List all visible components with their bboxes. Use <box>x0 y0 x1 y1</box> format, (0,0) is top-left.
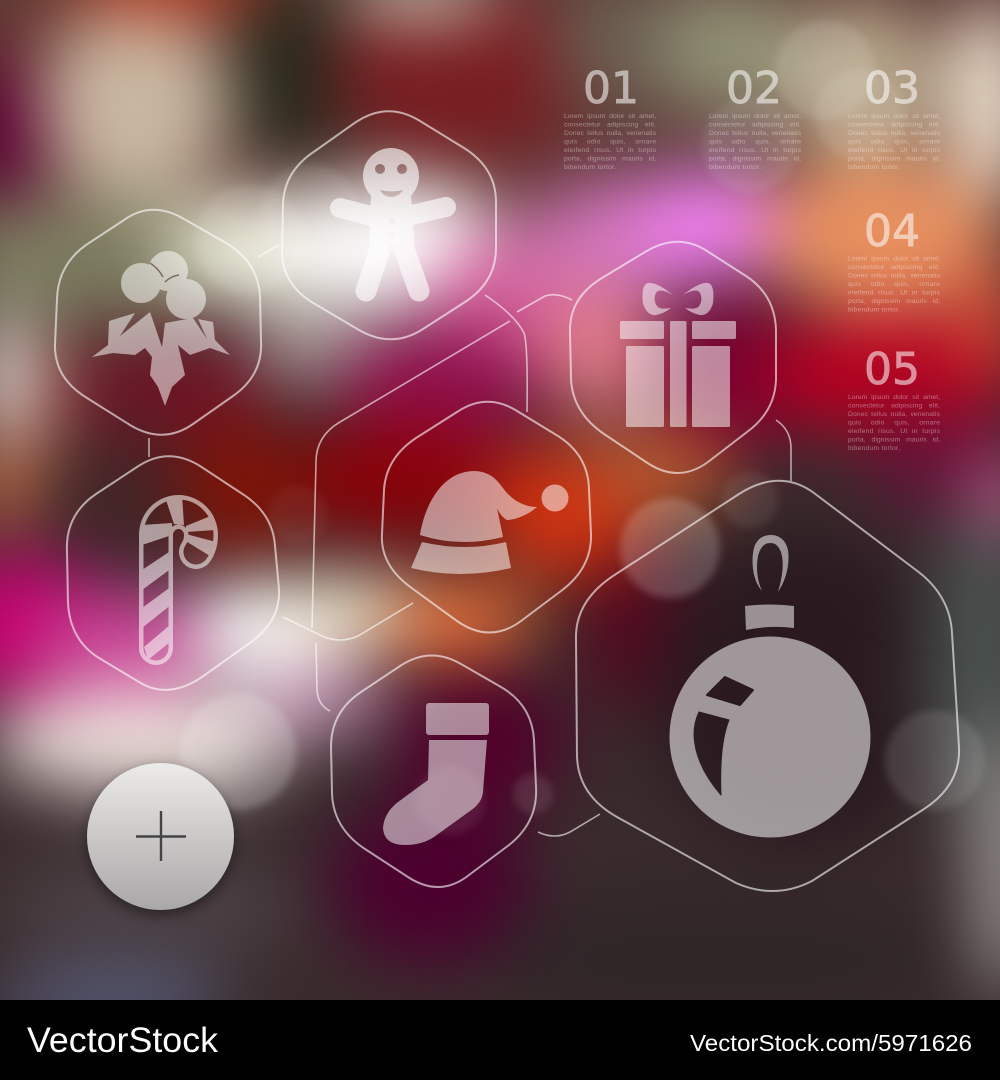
body text 03: consectetur adipiscing elit. <box>848 122 940 128</box>
body text 01: porta, dignissim mauris id, <box>564 156 656 162</box>
footer bar <box>0 1000 1000 1080</box>
body text 03: eleifend risus. Ut in turpis <box>848 147 941 154</box>
body text 01: eleifend risus. Ut in turpis <box>564 147 657 154</box>
icon: santa hat <box>411 471 568 574</box>
bokeh circles <box>180 20 985 835</box>
text: step 05: 05 <box>864 344 920 395</box>
body text 05: Lorem ipsum dolor sit amet, <box>848 394 940 401</box>
body text 01: quis odio quis, ornare <box>564 138 656 146</box>
body text 03: Donec tellus nulla, venenatis <box>848 130 941 137</box>
body text 02: quis odio quis, ornare <box>709 138 801 146</box>
body text 01: bibendum tortor. <box>564 164 616 171</box>
body text 04: Donec tellus nulla, venenatis <box>848 272 941 280</box>
icon: holly <box>92 251 230 406</box>
panel: santa hat <box>382 402 591 632</box>
body text 02: eleifend risus. Ut in turpis <box>709 147 802 154</box>
body text 03 <box>848 113 941 171</box>
body text 01: Lorem ipsum dolor sit amet, <box>564 113 656 120</box>
body text 02 <box>709 113 802 171</box>
body text 03: bibendum tortor. <box>848 164 900 171</box>
body text 04: porta, dignissim mauris id, <box>848 298 940 305</box>
body text 03: porta, dignissim mauris id, <box>848 156 940 162</box>
body text 05: bibendum tortor. <box>848 445 900 452</box>
body text 05: eleifend risus. Ut in turpis <box>848 428 941 435</box>
body text 02: Lorem ipsum dolor sit amet, <box>709 113 801 120</box>
body text 02: Donec tellus nulla, venenatis <box>709 130 802 137</box>
body text 03: quis odio quis, ornare <box>848 138 940 146</box>
text: step 04 <box>848 206 941 314</box>
panel: ornament <box>576 481 959 891</box>
body text 04: bibendum tortor. <box>848 306 900 314</box>
button: plus <box>87 763 234 910</box>
body text 04: Lorem ipsum dolor sit amet, <box>848 256 940 262</box>
text: step 01 <box>564 63 657 171</box>
body text 05: Donec tellus nulla, venenatis <box>848 411 941 418</box>
icon: gift <box>620 283 736 427</box>
connector lines <box>149 245 791 836</box>
panel: holly <box>55 210 261 435</box>
body text 04: quis odio quis, ornare <box>848 281 940 288</box>
body text 02: bibendum tortor. <box>709 164 761 171</box>
icon: ornament <box>670 535 870 838</box>
body text 05: consectetur adipiscing elit. <box>848 402 940 410</box>
text: step 04: 04 <box>864 206 920 257</box>
body text 05: porta, dignissim mauris id, <box>848 436 940 444</box>
body text 01 <box>564 113 657 171</box>
body text 02: consectetur adipiscing elit. <box>709 122 801 128</box>
footer logo text: VectorStock <box>27 1021 219 1060</box>
panel: gingerbread <box>282 111 496 339</box>
text: step 02: 02 <box>726 63 782 114</box>
text: step 03: 03 <box>864 63 920 114</box>
panel: candy cane <box>67 456 279 690</box>
text: step 01: 01 <box>583 63 639 114</box>
body text 05 <box>848 394 941 452</box>
panel: gift <box>570 242 776 473</box>
footer url text: VectorStock.com/5971626 <box>690 1030 972 1056</box>
body text 01: consectetur adipiscing elit. <box>564 122 656 128</box>
text: step 02 <box>709 63 802 171</box>
body text 02: porta, dignissim mauris id, <box>709 156 801 162</box>
panel: stocking <box>331 655 536 887</box>
body text 03: Lorem ipsum dolor sit amet, <box>848 113 940 120</box>
body text 05: quis odio quis, ornare <box>848 420 940 426</box>
icon: candy cane <box>139 495 218 665</box>
text: step 05 <box>848 344 941 452</box>
body text 01: Donec tellus nulla, venenatis <box>564 130 657 137</box>
body text 04 <box>848 256 941 314</box>
body text 04: eleifend risus. Ut in turpis <box>848 290 941 296</box>
text: step 03 <box>848 63 941 171</box>
body text 04: consectetur adipiscing elit. <box>848 264 940 271</box>
icon: gingerbread man <box>330 148 456 302</box>
icon: stocking <box>383 703 489 845</box>
